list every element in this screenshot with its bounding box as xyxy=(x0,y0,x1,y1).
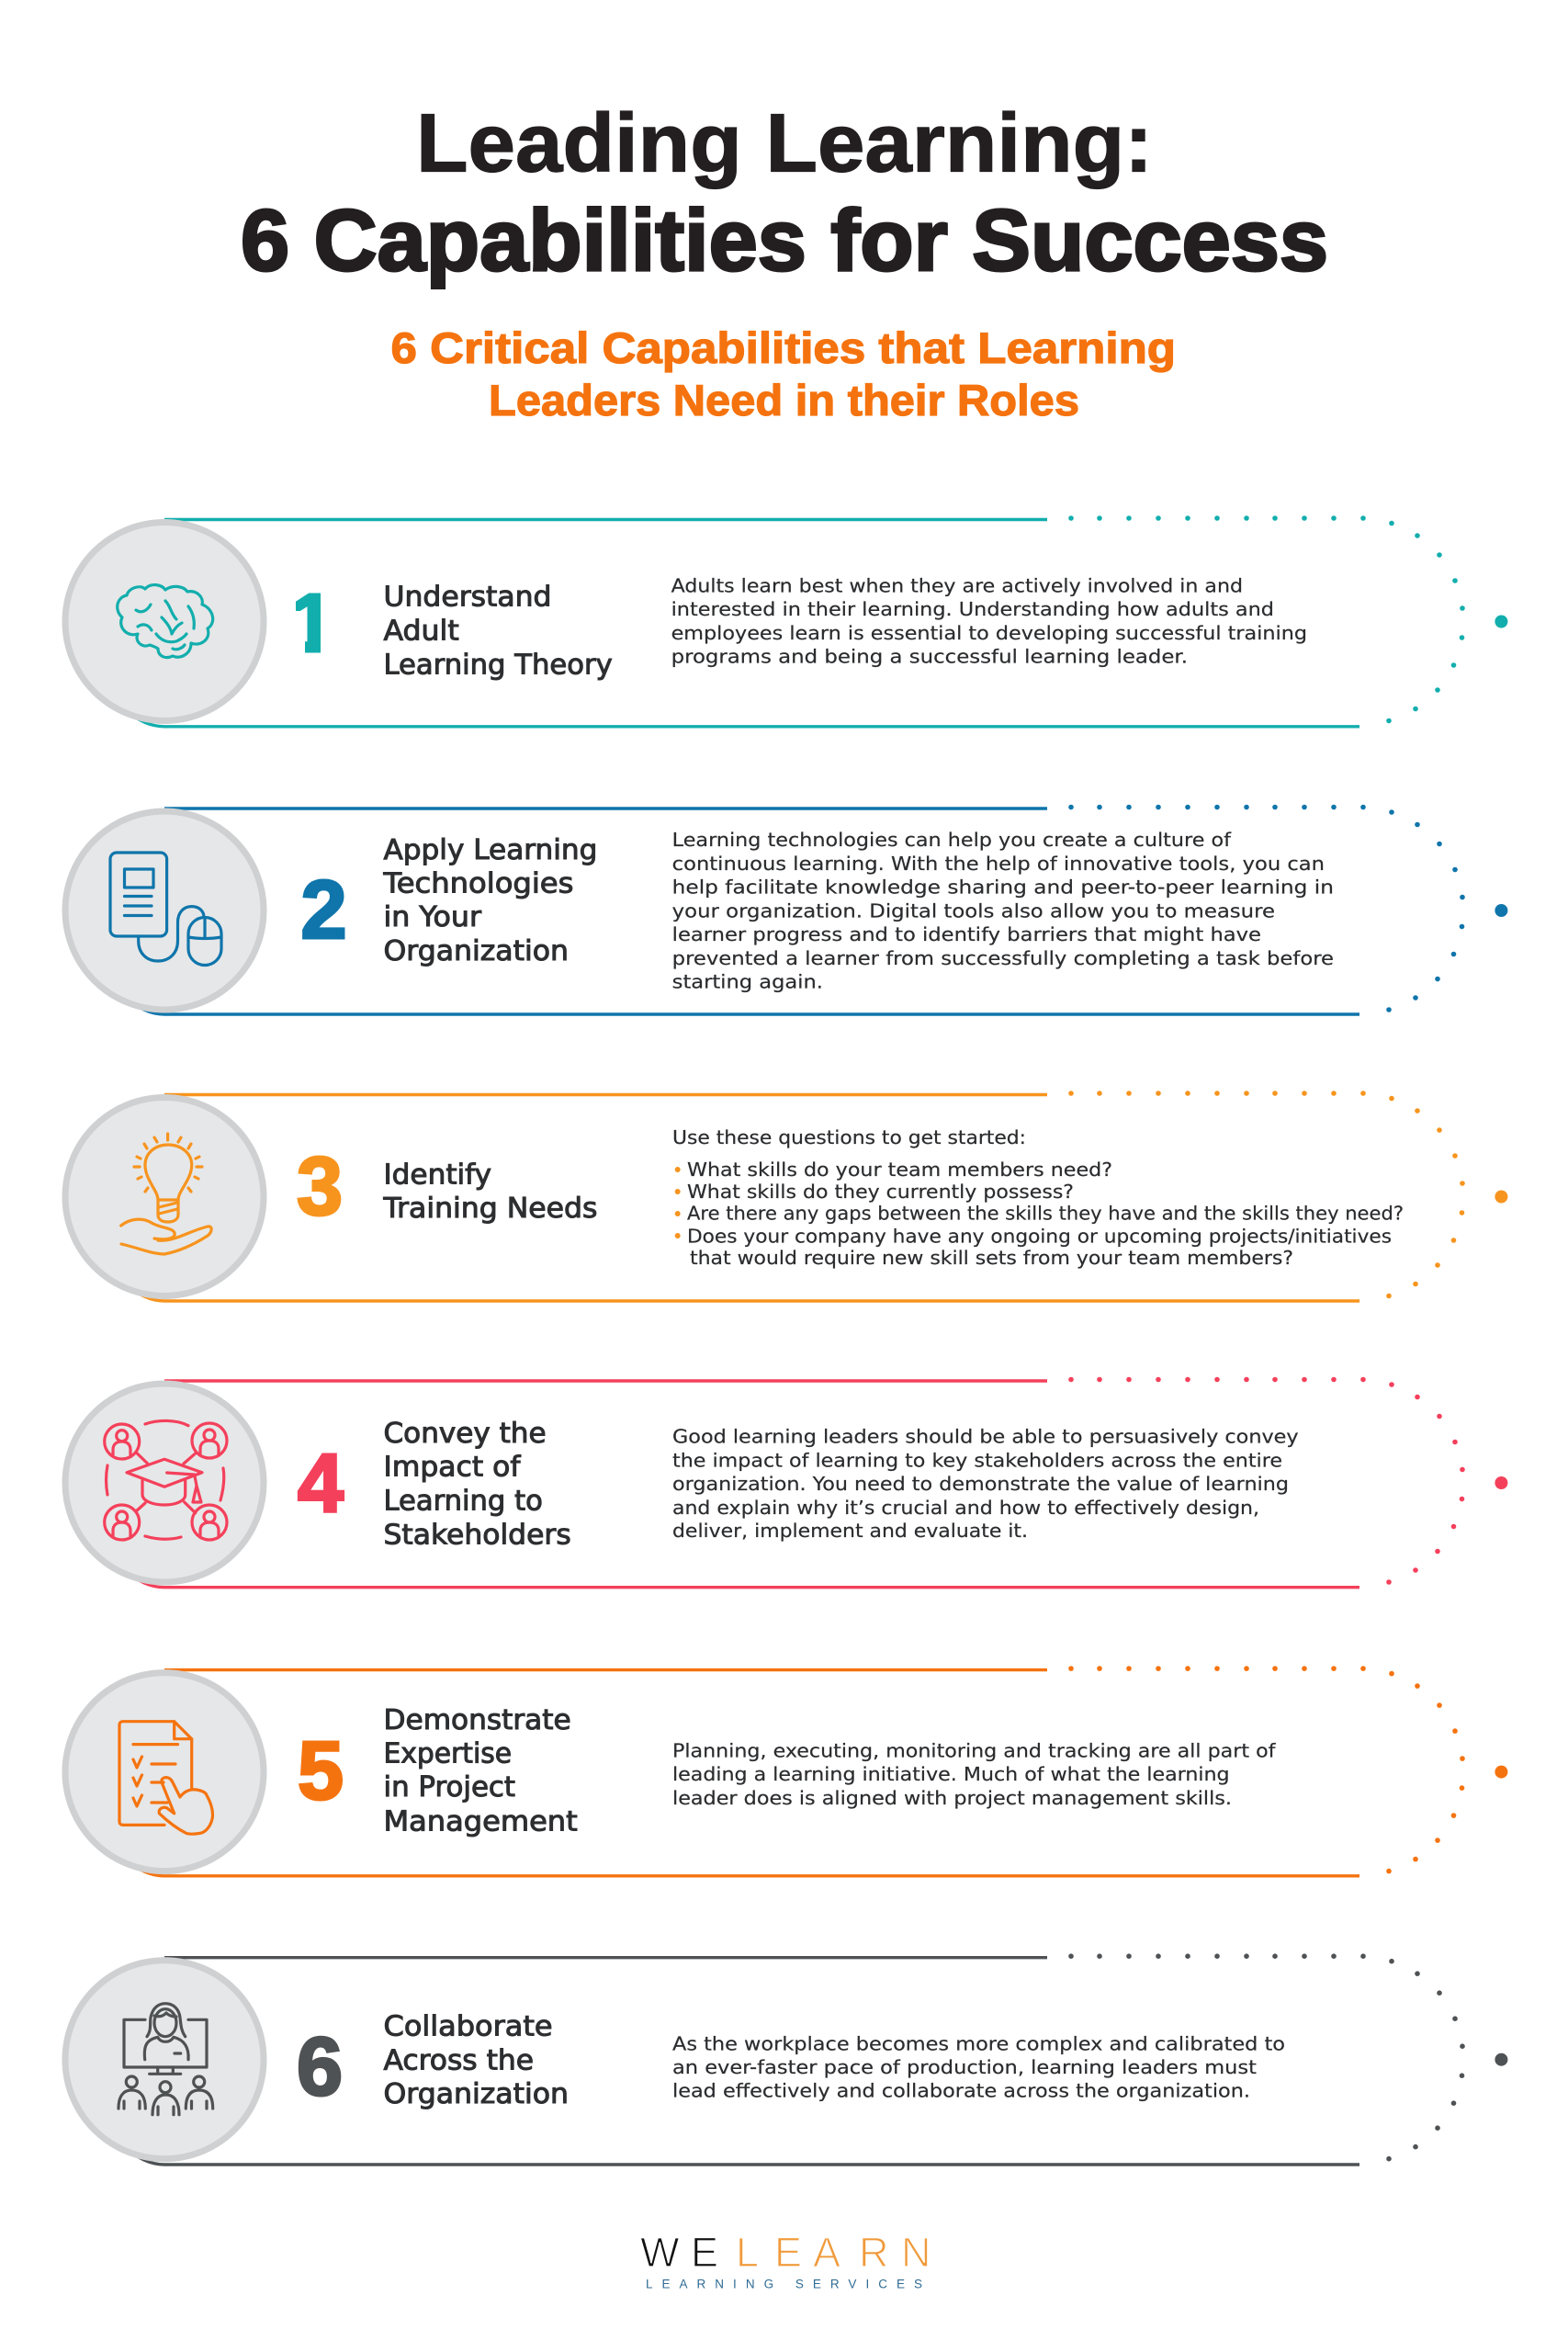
number 2: 2 xyxy=(300,865,347,956)
body text 6: lead effectively and collaborate across the organization. xyxy=(672,2080,1250,2102)
panel: capability 2 xyxy=(65,805,1507,1014)
body text 1: Adults learn best when they are actively involved in and xyxy=(671,575,1243,597)
heading 6: Across the xyxy=(384,2045,534,2076)
heading 1: Understand xyxy=(384,582,551,614)
icon: brain xyxy=(118,585,213,658)
body text 2: learner progress and to identify barriers that might have xyxy=(672,923,1261,945)
body text 2: prevented a learner from successfully completing a task before xyxy=(672,947,1334,969)
body text 5 xyxy=(672,1740,1277,1809)
icon: device and mouse xyxy=(110,853,221,965)
number 5: 5 xyxy=(298,1725,344,1817)
heading 6 xyxy=(384,2011,569,2110)
body text 2: help facilitate knowledge sharing and peer-to-peer learning in xyxy=(672,876,1334,899)
heading 3: Identify xyxy=(384,1159,491,1191)
icon: presenter on screen with audience xyxy=(118,2004,213,2115)
heading 2: Technologies xyxy=(382,867,573,900)
heading 2: Organization xyxy=(384,935,569,967)
body text 3: What skills do they currently possess? xyxy=(687,1181,1074,1203)
heading 6: Organization xyxy=(384,2078,569,2110)
heading 4: Impact of xyxy=(384,1452,522,1484)
heading 1 xyxy=(384,582,613,682)
body text 3: Use these questions to get started: xyxy=(672,1126,1026,1148)
panel: capability 3 xyxy=(65,1091,1507,1301)
body text 1: programs and being a successful learning leader. xyxy=(671,646,1188,668)
title: Leading Learning: xyxy=(416,98,1153,190)
heading 6: Collaborate xyxy=(384,2011,553,2043)
body text 4: the impact of learning to key stakeholders across the entire xyxy=(672,1450,1282,1472)
heading 5: Demonstrate xyxy=(384,1704,571,1736)
body text 3: Does your company have any ongoing or upcoming projects/initiatives xyxy=(687,1225,1392,1247)
body text 6: an ever-faster pace of production, learning leaders must xyxy=(672,2056,1257,2078)
body text 1: interested in their learning. Understanding how adults and xyxy=(671,598,1274,620)
body text 6 xyxy=(672,2033,1285,2102)
panel: capability 4 xyxy=(65,1377,1507,1588)
logo: WeLearn Learning Services: WE xyxy=(640,2229,718,2276)
logo: WeLearn Learning Services: LEARN xyxy=(736,2229,931,2276)
body text 4: and explain why it’s crucial and how to effectively design, xyxy=(672,1497,1259,1519)
heading 1: Adult xyxy=(384,616,459,648)
body text 3: that would require new skill sets from your team members? xyxy=(690,1247,1293,1269)
heading 1: Learning Theory xyxy=(384,649,613,682)
title xyxy=(241,98,1328,289)
title: 6 Capabilities for Success xyxy=(241,192,1328,289)
body text 2: continuous learning. With the help of innovative tools, you can xyxy=(672,853,1325,875)
body text 3 xyxy=(672,1126,1404,1269)
body text 2: Learning technologies can help you create a culture of xyxy=(672,829,1232,851)
subtitle xyxy=(391,323,1176,424)
heading 5: in Project xyxy=(384,1771,515,1804)
body text 4 xyxy=(672,1426,1299,1542)
heading 2: in Your xyxy=(384,901,482,933)
body text 2: your organization. Digital tools also allow you to measure xyxy=(672,899,1275,922)
heading 4: Convey the xyxy=(384,1418,547,1450)
heading 3 xyxy=(382,1159,597,1225)
logo: WeLearn Learning Services: LEARNING SERVICES xyxy=(646,2278,922,2291)
panel: capability 6 xyxy=(65,1953,1507,2165)
body text 2: starting again. xyxy=(672,970,823,992)
panel: capability 1 xyxy=(65,515,1507,727)
number 3: 3 xyxy=(297,1141,343,1233)
number 4: 4 xyxy=(298,1438,344,1530)
body text 1: employees learn is essential to developing successful training xyxy=(671,622,1307,644)
heading 5 xyxy=(384,1704,578,1838)
panel: capability 5 xyxy=(65,1666,1507,1876)
heading 5: Expertise xyxy=(384,1737,512,1770)
body text 4: Good learning leaders should be able to persuasively convey xyxy=(672,1426,1299,1448)
number 6: 6 xyxy=(297,2021,343,2113)
body text 4: deliver, implement and evaluate it. xyxy=(672,1520,1028,1542)
heading 4: Stakeholders xyxy=(384,1520,571,1552)
heading 2 xyxy=(382,834,597,967)
icon: graduation cap with stakeholders xyxy=(105,1420,227,1540)
body text 3: Are there any gaps between the skills they have and the skills they need? xyxy=(687,1203,1404,1225)
heading 3: Training Needs xyxy=(382,1193,597,1225)
heading 2: Apply Learning xyxy=(384,834,597,866)
body text 3: What skills do your team members need? xyxy=(687,1159,1112,1181)
body text 5: Planning, executing, monitoring and tracking are all part of xyxy=(672,1740,1277,1762)
heading 4: Learning to xyxy=(384,1485,543,1518)
heading 5: Management xyxy=(384,1805,578,1838)
body text 6: As the workplace becomes more complex and calibrated to xyxy=(672,2033,1285,2055)
body text 5: leading a learning initiative. Much of what the learning xyxy=(672,1763,1230,1785)
body text 5: leader does is aligned with project management skills. xyxy=(672,1787,1232,1809)
heading 4 xyxy=(384,1418,571,1552)
body text 2 xyxy=(672,829,1334,992)
icon: checklist with pointing hand xyxy=(119,1722,213,1834)
body text 1 xyxy=(671,575,1307,668)
logo: WeLearn Learning Services xyxy=(640,2229,931,2291)
number 1: 1 xyxy=(289,578,335,670)
subtitle: 6 Critical Capabilities that Learning xyxy=(391,323,1176,372)
icon: light bulb in hand xyxy=(121,1134,211,1254)
subtitle: Leaders Need in their Roles xyxy=(489,376,1079,424)
body text 4: organization. You need to demonstrate the value of learning xyxy=(672,1473,1289,1495)
